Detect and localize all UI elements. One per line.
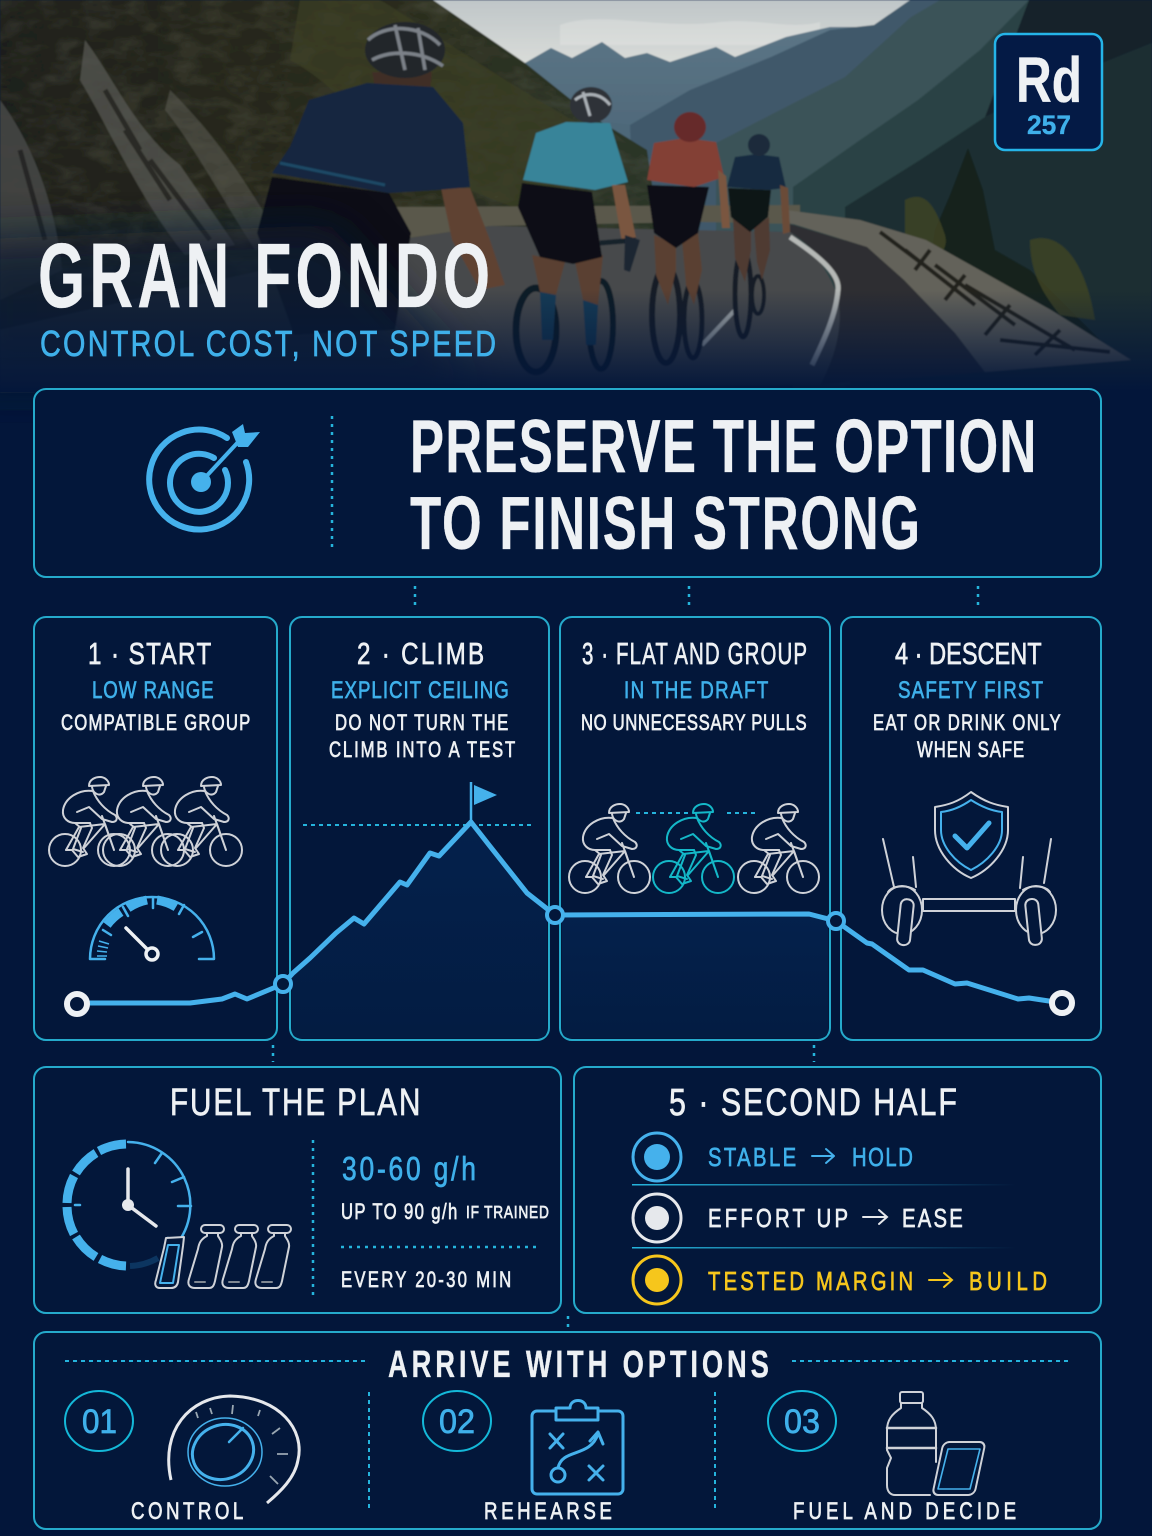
item 02: rehearse: REHEARSE <box>484 1498 612 1525</box>
note: up to 90 g/h if trained: UP TO 90 g/h <box>341 1200 457 1225</box>
row: tested margin build: BUILD <box>969 1267 1047 1296</box>
row: stable hold <box>633 1133 913 1181</box>
note: up to 90 g/h if trained: IF TRAINED <box>466 1203 549 1223</box>
route node: start <box>67 994 87 1014</box>
heading: arrive with options: ARRIVE WITH OPTIONS <box>388 1344 769 1386</box>
icon: gels <box>155 1225 291 1288</box>
heading: preserve the option: TO FINISH STRONG <box>410 481 920 565</box>
note: do not turn the climb into a test: DO NOT TURN THE <box>335 711 508 736</box>
rock faces <box>80 40 235 255</box>
item 01: control <box>65 1391 299 1525</box>
subheading: in the draft: IN THE DRAFT <box>624 677 768 704</box>
row: stable hold: STABLE <box>708 1143 796 1172</box>
panel: goal banner <box>34 389 1101 577</box>
item 03: fuel and decide <box>768 1391 1016 1525</box>
rider 2 <box>516 87 640 372</box>
panel: arrive with options <box>34 1332 1101 1529</box>
route node: descent <box>828 913 844 929</box>
row: effort up ease: EASE <box>902 1204 963 1233</box>
note: eat or drink only when safe: EAT OR DRINK ONLY <box>873 711 1061 736</box>
slope texture <box>0 0 652 238</box>
item 01: control: CONTROL <box>131 1498 243 1525</box>
trees <box>925 148 1100 360</box>
icon: dial <box>169 1396 299 1503</box>
row: tested margin build <box>633 1256 1047 1304</box>
rider 4 <box>727 134 790 337</box>
icon: clock <box>67 1142 191 1266</box>
distant mountains <box>500 0 1000 260</box>
note: do not turn the climb into a test <box>329 711 515 763</box>
elevation profile line <box>67 822 1072 1014</box>
climb area fill <box>292 822 547 1038</box>
item 02: rehearse <box>423 1391 623 1525</box>
icon: low gauge <box>90 897 214 960</box>
right valley slope <box>793 0 1152 390</box>
icon: three riders <box>49 777 242 866</box>
heading: descent: 4 · DESCENT <box>895 636 1042 671</box>
panel: 4 descent <box>841 617 1101 1040</box>
subtitle: CONTROL COST, NOT SPEED <box>40 323 496 364</box>
heading: fuel the plan: FUEL THE PLAN <box>170 1082 420 1124</box>
road edge line <box>790 237 838 365</box>
heading: second half: 5 · SECOND HALF <box>669 1082 957 1124</box>
row: tested margin build: TESTED MARGIN <box>708 1267 913 1296</box>
item 03: fuel and decide: 03 <box>784 1403 820 1441</box>
icon: target with arrow <box>149 424 260 530</box>
badge: Rd 257: 257 <box>1027 110 1071 140</box>
icon: summit flag <box>471 782 497 822</box>
icon: hands on bars <box>882 839 1056 946</box>
rider 3 <box>647 112 730 363</box>
left rock slope <box>0 0 660 390</box>
heading: preserve the option <box>410 404 1036 565</box>
heading: climb: 2 · CLIMB <box>357 636 484 671</box>
panel: 3 flat and group <box>560 617 830 1040</box>
note: up to 90 g/h if trained <box>341 1200 549 1225</box>
note: every 20-30 min: EVERY 20-30 MIN <box>341 1268 511 1293</box>
row: stable hold: HOLD <box>852 1143 913 1172</box>
route node: climb <box>275 976 291 992</box>
panel: fuel the plan <box>34 1067 561 1313</box>
note: compatible group: COMPATIBLE GROUP <box>61 711 250 736</box>
road <box>0 226 850 392</box>
rider 1 <box>257 22 505 335</box>
item 03: fuel and decide: FUEL AND DECIDE <box>793 1498 1016 1525</box>
heading: start: 1 · START <box>88 636 211 671</box>
badge: Rd 257 <box>995 34 1102 150</box>
item 01: control: 01 <box>82 1403 117 1441</box>
route node: finish <box>1052 993 1072 1013</box>
hero photo: cyclists on mountain road <box>0 0 1152 392</box>
panel: 2 climb <box>290 617 549 1040</box>
route node: flat <box>547 907 563 923</box>
note: do not turn the climb into a test: CLIMB INTO A TEST <box>329 738 515 763</box>
row: effort up ease: EFFORT UP <box>708 1204 848 1233</box>
left shadow behind title <box>0 225 480 390</box>
icon: shield with check <box>935 792 1008 878</box>
figure: 30-60 g/h: 30-60 g/h <box>342 1151 476 1188</box>
bottom fade <box>0 290 1152 392</box>
stone wall <box>786 210 1131 372</box>
subheading: safety first: SAFETY FIRST <box>898 677 1043 704</box>
note: eat or drink only when safe: WHEN SAFE <box>917 738 1024 763</box>
icon: drafting riders <box>569 804 819 893</box>
sky <box>420 0 940 90</box>
far wall <box>395 205 800 240</box>
heading: preserve the option: PRESERVE THE OPTION <box>410 404 1036 488</box>
item 02: rehearse: 02 <box>439 1403 475 1441</box>
panel: second half <box>574 1067 1101 1313</box>
panel: 1 start <box>34 617 277 1040</box>
icon: clipboard plan <box>532 1400 623 1494</box>
badge: Rd 257: Rd <box>1016 44 1082 116</box>
subheading: low range: LOW RANGE <box>92 677 214 704</box>
heading: flat and group: 3 · FLAT AND GROUP <box>582 636 807 671</box>
row: effort up ease <box>633 1194 963 1242</box>
mid ridges <box>630 0 1152 360</box>
note: no unnecessary pulls: NO UNNECESSARY PULLS <box>581 711 807 736</box>
note: eat or drink only when safe <box>873 711 1061 763</box>
icon: bottle and phone <box>887 1392 986 1495</box>
subheading: explicit ceiling: EXPLICIT CEILING <box>331 677 509 704</box>
title: GRAN FONDO <box>38 223 490 327</box>
